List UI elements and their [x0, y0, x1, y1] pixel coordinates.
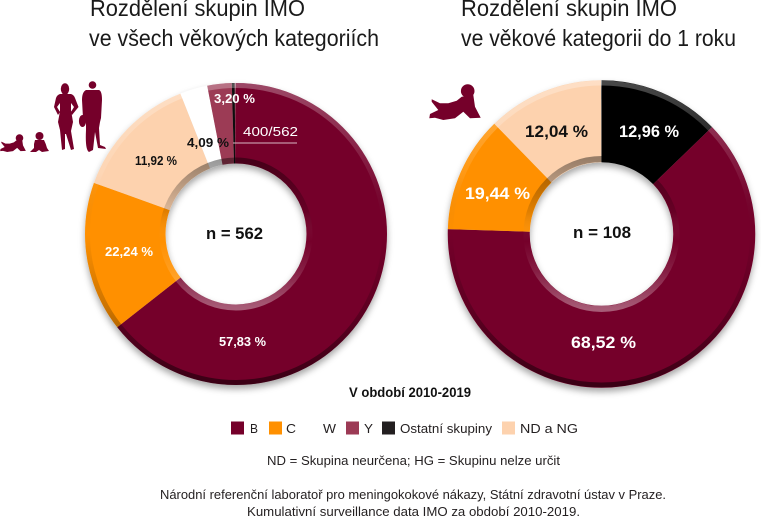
legend: Ostatní skupiny [400, 421, 493, 436]
value labels: under 1 year: 12,04 % [525, 122, 588, 141]
value labels: under 1 year: n = 108 [573, 223, 631, 242]
value labels: under 1 year: 68,52 % [571, 333, 636, 352]
value labels: all age groups: 11,92 % [135, 154, 177, 168]
value labels: all age groups: 57,83 % [219, 334, 266, 349]
legend: B [250, 421, 258, 436]
value labels: under 1 year: 19,44 % [465, 184, 530, 203]
legend [231, 421, 578, 436]
value labels: all age groups: 4,09 % [187, 136, 229, 150]
title: under 1 year [461, 0, 736, 51]
source note: Kumulativní surveillance data IMO za období 2010-2019. [247, 505, 580, 519]
source note: Národní referenční laboratoř pro meningokokové nákazy, Státní zdravotní ústav v Praze. [160, 488, 666, 502]
value labels: under 1 year: 12,96 % [619, 122, 679, 141]
value labels: all age groups: 400/562 [243, 124, 298, 139]
legend: C [286, 421, 296, 436]
donut chart: all age groups [88, 86, 384, 382]
icon: baby silhouette [429, 84, 481, 120]
legend: ND a NG [520, 421, 578, 436]
abbreviation note: ND = Skupina neurčena; HG = Skupinu nelze určit [267, 453, 560, 468]
donut chart: under 1 year [450, 83, 752, 385]
value labels: all age groups: 3,20 % [214, 92, 255, 106]
legend: Y [364, 421, 373, 436]
value labels: all age groups: n = 562 [206, 224, 263, 243]
title: all age groups [89, 0, 379, 51]
period heading: V období 2010-2019 [349, 385, 471, 400]
legend: W [323, 421, 337, 436]
value labels: all age groups: 22,24 % [105, 244, 153, 259]
title: all age groups: ve všech věkových kategoriích [89, 25, 379, 51]
value labels: under 1 year [465, 122, 679, 352]
icon: family silhouettes [0, 81, 106, 152]
source note [160, 488, 666, 519]
title: under 1 year: ve věkové kategorii do 1 roku [461, 25, 736, 51]
value labels: all age groups [105, 92, 298, 349]
